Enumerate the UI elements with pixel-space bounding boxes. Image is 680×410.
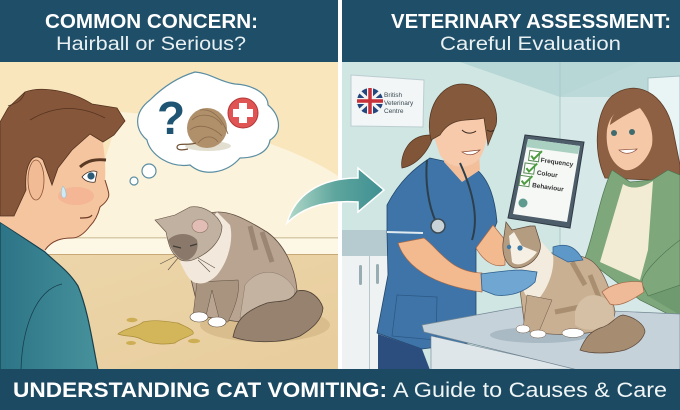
tablet checklist: Behaviour	[532, 182, 564, 194]
exam table	[422, 307, 680, 370]
head	[155, 207, 222, 261]
worried owner	[0, 89, 125, 370]
owner hand on cat	[642, 240, 680, 296]
cat looking unwell	[155, 207, 330, 342]
clinic sign: Centre	[384, 108, 404, 115]
vomit puddle	[118, 318, 200, 345]
cabinets	[342, 230, 392, 369]
owner on right	[585, 88, 680, 320]
title banner: UNDERSTANDING CAT VOMITING:	[13, 379, 387, 402]
head	[503, 222, 540, 268]
fluffy tail	[233, 290, 323, 342]
clinic sign: Veterinary	[384, 100, 414, 107]
arrow	[287, 168, 384, 223]
front legs	[193, 280, 239, 322]
tablet checklist	[508, 135, 584, 228]
thought bubble	[130, 72, 278, 185]
header: veterinary assessment: Careful Evaluation	[440, 34, 621, 55]
header: common concern: Hairball or Serious?	[56, 34, 246, 55]
header: common concern	[0, 0, 338, 62]
icon: paw	[518, 198, 528, 208]
icon: hairball	[177, 108, 231, 151]
tail	[580, 315, 645, 353]
white ruff	[180, 212, 231, 283]
header: veterinary assessment: VETERINARY ASSESSMENT:	[391, 11, 671, 33]
header: veterinary assessment	[342, 0, 680, 62]
title banner: A Guide to Causes & Care	[393, 379, 667, 402]
clinic sign: British	[384, 92, 402, 99]
blue glove	[481, 245, 583, 295]
icon: union flag	[357, 88, 383, 114]
icon: question mark: ?	[157, 92, 185, 144]
title banner	[0, 369, 680, 410]
vet nurse	[377, 84, 505, 370]
icon: medical cross	[228, 98, 258, 128]
tablet checklist: Colour	[536, 170, 559, 180]
clinic sign	[351, 75, 424, 127]
tablet checklist: Frequency	[540, 157, 574, 169]
panel: veterinary assessment	[342, 62, 680, 370]
header: common concern: COMMON CONCERN:	[45, 11, 258, 33]
cat on table	[490, 222, 645, 353]
panel: common concern	[0, 62, 338, 370]
owner hand	[602, 282, 644, 305]
